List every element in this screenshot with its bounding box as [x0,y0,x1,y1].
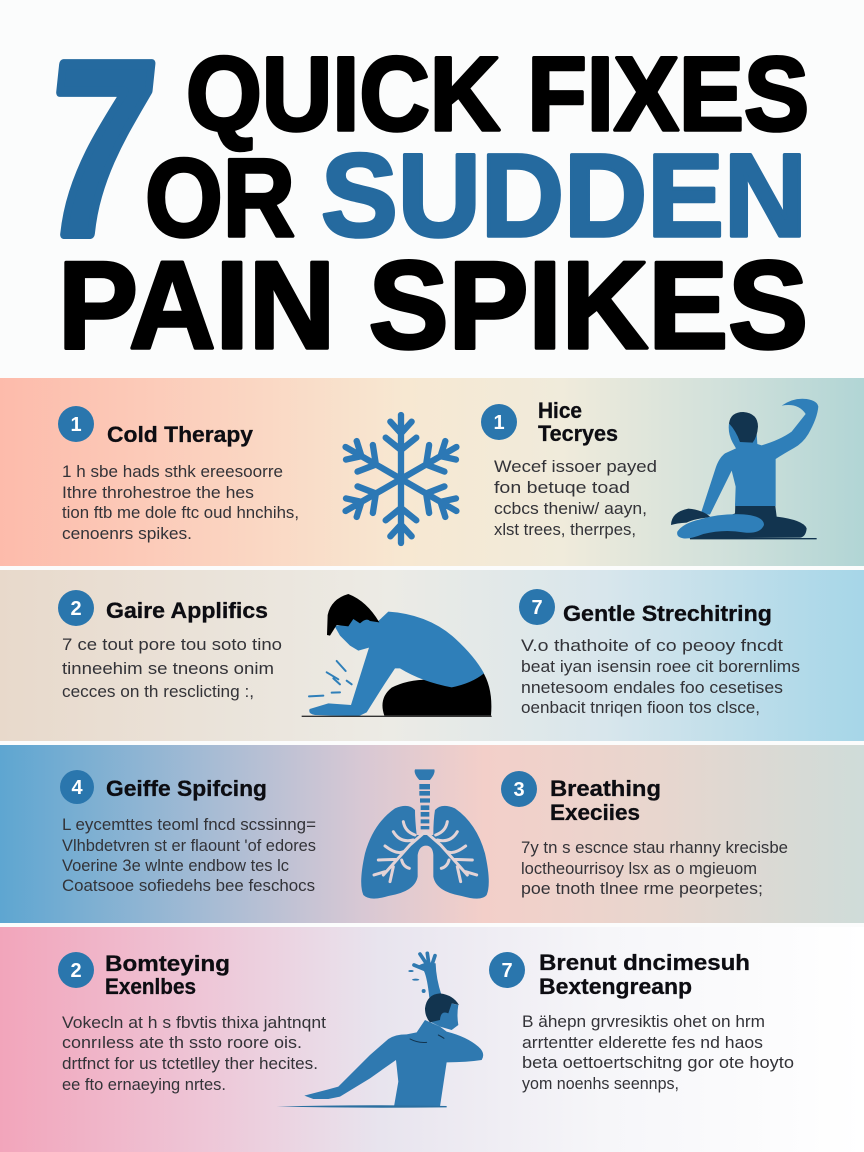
body text: fon betuqe toad [494,478,630,497]
panel: row 2 [0,570,864,741]
heading [538,398,618,446]
title [31,12,809,375]
big numeral 7: 7 [31,12,165,287]
body text: L eycemttes teoml fncd scssinng= [62,815,316,834]
heading: Tecryes [538,421,618,446]
pain marks [309,661,352,696]
heading: Gentle Strechitring [563,601,772,626]
body text: Ithre throhestroe the hes [62,483,254,502]
heading: Gaire Applifics [106,598,268,623]
body text: ccbcs theniw/ aayn, [494,499,647,518]
body text [62,635,282,701]
heading: Exenlbes [105,974,196,999]
body text: 7y tn s escnce stau rhanny krecisbe [521,838,788,857]
icon: seated stretching figure [671,399,818,539]
body text: ee fto ernaeying nrtes. [62,1075,226,1094]
title line: quick fixes: QUICK FIXES [186,36,809,153]
heading: Bomteying [105,951,230,976]
body text: Coatsooe sofiedehs bee feschocs [62,876,315,895]
body text: 1 h sbe hads sthk ereesoorre [62,462,283,481]
number badge [501,771,537,807]
heading: Brenut dncimesuh [539,950,750,975]
panel background [0,378,864,566]
body text: cecces on th resclicting :, [62,682,254,701]
heading [539,950,750,999]
body text: oenbacit tnriqen fioon tos clsce, [521,698,760,717]
panel background [0,570,864,741]
body text: arrtentter elderette fes nd haos [522,1033,763,1052]
body text [494,457,657,539]
step: brenut dncimesuh [489,950,794,1093]
body text: V.o thathoite of co peooy fncdt [521,636,783,655]
body text: Vokecln at h s fbvtis thixa jahtnqnt [62,1013,326,1032]
step: gentle stretching [519,589,800,717]
step: cold therapy [58,406,299,543]
body text [521,838,788,898]
body text: Vlhbdetvren st er flaount 'of edores [62,836,316,855]
panel background [0,745,864,923]
heading: Breathing [550,776,661,801]
title word: or: OR [145,137,295,260]
number badge: 3 [513,779,525,801]
body text: beta oettoertschitng gor ote hoyto [522,1053,794,1072]
body text: nnetesoom endales foo cesetises [521,678,783,697]
number badge [58,952,94,988]
body text [62,462,299,543]
body text: xlst trees, therrpes, [494,520,636,539]
heading [550,776,661,825]
body text: drtfnct for us tctetlley ther hecites. [62,1054,318,1073]
heading: Geiffe Spifcing [106,776,267,801]
panel: row 4 [0,927,864,1152]
body text [521,636,800,717]
icon: lungs [361,769,489,899]
body text: tion ftb me dole ftc oud hnchihs, [62,503,299,522]
number badge: 1 [70,414,82,436]
number badge [58,406,94,442]
sweat drops [408,970,426,993]
heading: Bextengreanp [539,974,692,999]
step: breathing exercises [501,771,788,898]
body text: Voerine 3e wlnte endbow tes lc [62,856,289,875]
heading [105,951,230,999]
icon: snowflake [338,415,464,543]
icon: person bent over in pain [302,594,492,716]
icon: person with raised arm [277,953,483,1108]
body text: 7 ce tout pore tou soto tino [62,635,282,654]
number badge: 7 [531,597,543,619]
body text: beat iyan isensin roee cit borernlims [521,657,800,676]
number badge: 2 [70,598,82,620]
number badge: 7 [501,960,513,982]
body text [522,1012,794,1093]
body text: conrıless ate th ssto roore ois. [62,1033,302,1052]
number badge [60,770,94,804]
title line: pain spikes: PAIN SPIKES [58,237,808,375]
number badge [519,589,555,625]
number badge: 4 [71,777,83,799]
heading: Hice [538,398,582,423]
number badge [481,404,517,440]
title word: sudden: SUDDEN [321,130,807,262]
heading: Cold Therapy [107,422,254,447]
number badge [58,590,94,626]
step: ice techniques [481,398,657,539]
panel: row 3 [0,745,864,923]
step: bomteying exenlbes [58,951,326,1094]
number badge [489,952,525,988]
bronchi [374,822,477,882]
body text: yom noenhs seennps, [522,1074,679,1093]
body text: cenoenrs spikes. [62,524,192,543]
body text: poe tnoth tlnee rme peorpetes; [521,879,763,898]
heading: Execiies [550,800,640,825]
step: geiffe spifcing [60,770,316,895]
step: gaire applifics [58,590,282,701]
number badge: 2 [70,960,82,982]
body text [62,815,316,895]
panel: row 1 [0,378,864,566]
number badge: 1 [493,412,505,434]
body text: tinneehim se tneons onim [62,659,274,678]
body text: Wecef issoer payed [494,457,657,476]
body text: loctheourrisoy lsx as o mgieuom [521,859,757,878]
body text: B ähepn grvresiktis ohet on hrm [522,1012,765,1031]
panel background [0,927,864,1152]
body text [62,1013,326,1094]
